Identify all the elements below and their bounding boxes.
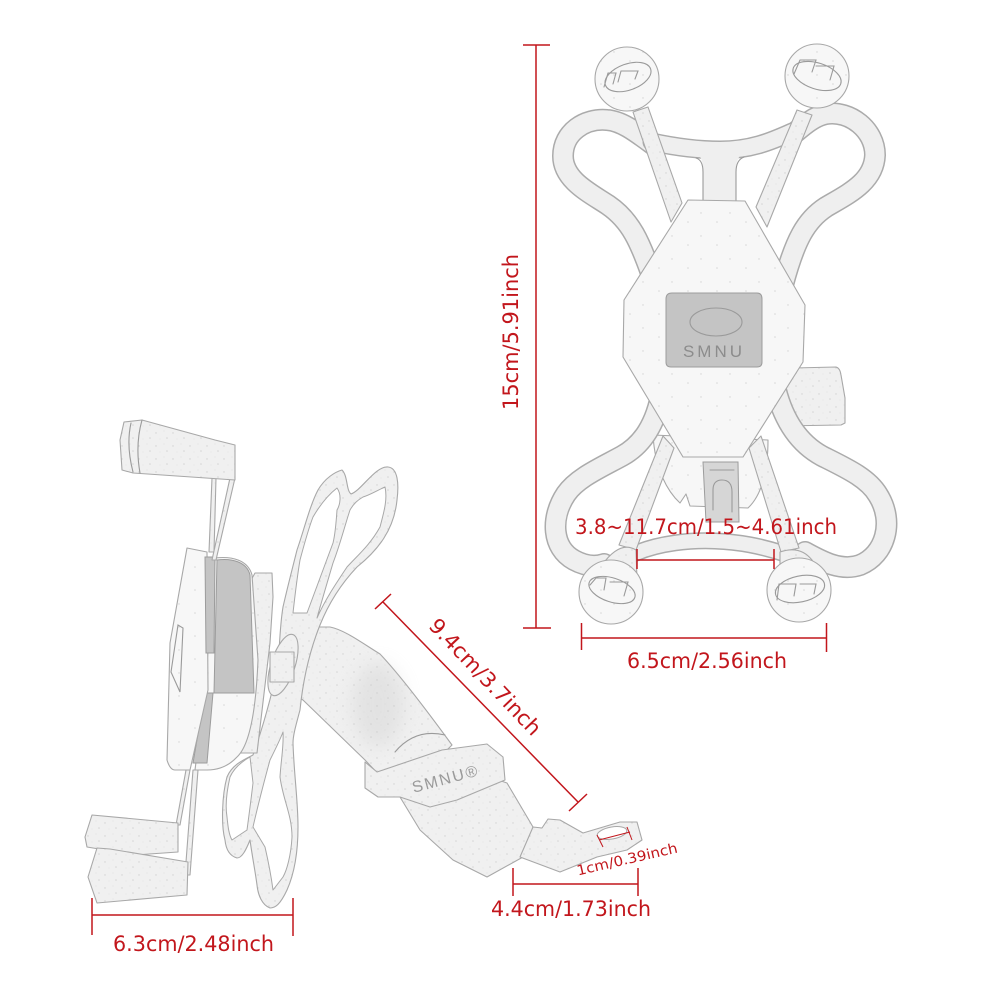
central plate bbox=[623, 200, 805, 457]
side strip bbox=[205, 557, 215, 653]
logo plate: SMNU bbox=[683, 342, 745, 361]
four sliding arms bbox=[619, 107, 812, 552]
lower stem with engraving bbox=[703, 462, 739, 522]
bottom-left knob bbox=[579, 547, 643, 624]
bottom-right knob bbox=[767, 550, 831, 622]
dimension: ring hole 1cm: 1cm/0.39inch bbox=[575, 841, 679, 879]
front plate bbox=[167, 548, 208, 770]
top-right knob bbox=[785, 44, 849, 108]
dimension: height 15cm bbox=[499, 45, 551, 628]
ball mount behind holder bbox=[653, 435, 768, 508]
top grips bbox=[120, 420, 235, 480]
mount knob on plate bbox=[262, 631, 304, 699]
dimension: cradle depth 6.3cm: 6.3cm/2.48inch bbox=[113, 932, 274, 956]
lower rods bbox=[176, 770, 198, 875]
side slot bbox=[171, 625, 183, 692]
dimension: ring hole 1cm bbox=[575, 827, 679, 879]
mounting arm bbox=[285, 627, 452, 797]
clamp block behind holder bbox=[770, 367, 845, 426]
dimension: width 6.5cm bbox=[582, 623, 826, 673]
knob with SMNU branding bbox=[365, 744, 533, 877]
butterfly cradle bbox=[223, 467, 398, 908]
dimension: height 15cm: 15cm/5.91inch bbox=[499, 254, 523, 410]
dimension: terminal 4.4cm bbox=[491, 868, 651, 921]
upper cradle band bbox=[563, 113, 875, 285]
dimension: arm 9.4cm: 9.4cm/3.7inch bbox=[424, 614, 546, 740]
logo plate bbox=[666, 293, 762, 367]
ball socket bbox=[193, 558, 258, 770]
dimension: arm 9.4cm bbox=[375, 594, 587, 811]
front view of phone holder bbox=[556, 44, 886, 624]
lower grip rear bbox=[85, 815, 178, 855]
dimension: grip range: 3.8~11.7cm/1.5~4.61inch bbox=[575, 515, 837, 539]
lower cradle band bbox=[556, 390, 886, 567]
dimension: width 6.5cm: 6.5cm/2.56inch bbox=[627, 649, 787, 673]
side view of phone holder bbox=[85, 420, 642, 908]
dimension: cradle depth 6.3cm bbox=[92, 898, 293, 956]
upper rods bbox=[209, 478, 235, 560]
ring terminal bbox=[520, 819, 642, 872]
dimension: terminal 4.4cm: 4.4cm/1.73inch bbox=[491, 897, 651, 921]
rear disc bbox=[240, 573, 273, 753]
lower grip front bbox=[88, 848, 188, 903]
top-left knob bbox=[595, 47, 659, 111]
knob with SMNU branding: SMNU® bbox=[410, 763, 481, 797]
dimension: grip range bbox=[575, 515, 837, 569]
